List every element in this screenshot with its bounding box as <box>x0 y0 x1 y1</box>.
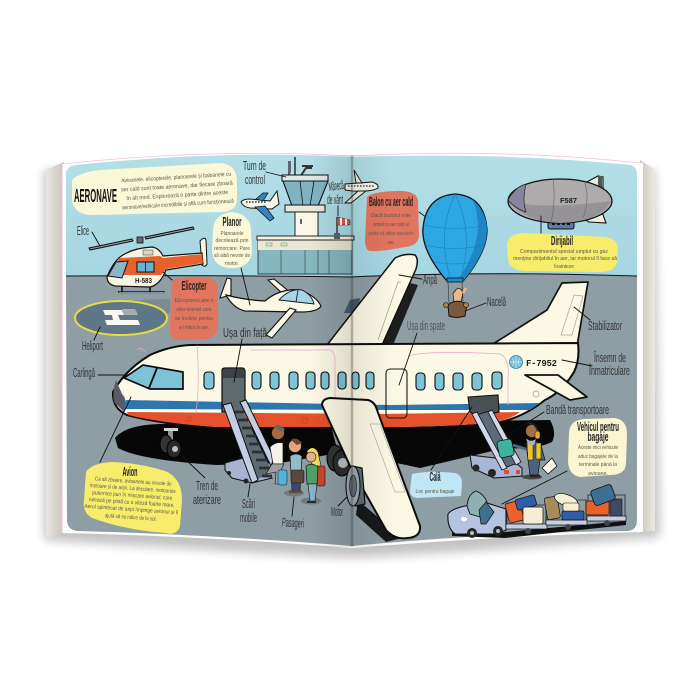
panel: Elicopter: elice imensă care <box>176 307 212 313</box>
label: Însemn de înmatriculare <box>562 350 630 378</box>
label: Însemn de înmatriculare: Înmatriculare <box>588 363 630 378</box>
panel: Avion <box>84 397 182 534</box>
panel: Elicopter: Elicopter <box>182 279 207 293</box>
label: Mânecă de vânt <box>327 178 345 216</box>
rear door <box>386 369 407 418</box>
panel: Planor: Planor <box>222 215 242 229</box>
open book block <box>46 152 655 548</box>
glider <box>220 278 321 338</box>
helicopter <box>89 227 207 293</box>
mobile stairs <box>223 400 274 484</box>
text: Aripă <box>423 273 437 287</box>
label: Scări mobile: Scări <box>242 497 255 511</box>
panel: Planor: să aibă nevoie de <box>214 253 250 259</box>
panel: Cală: Cală <box>430 470 441 484</box>
blimp: F587 <box>560 196 577 205</box>
small plane in sky <box>241 191 279 221</box>
trailer with luggage <box>586 484 626 526</box>
registration mark <box>510 356 557 369</box>
text: Pasageri <box>282 515 304 531</box>
baggage tractor <box>448 491 506 538</box>
intro text: aeronave/vehicule incredibile și află cum funcționează <box>122 199 235 211</box>
panel: Vehicul pentru bagaje: aduc bagajele de la <box>578 454 619 460</box>
label: Stabilizator: Stabilizator <box>588 319 622 333</box>
intro text: aer cald sunt toate aeronave, dar fiecare zboară <box>121 181 234 193</box>
label: Tren de aterizare: Tren de <box>196 479 218 493</box>
conveyor vehicle <box>468 395 522 478</box>
label: Nacelă <box>465 295 506 311</box>
label: Tren de aterizare: aterizare <box>193 493 221 507</box>
text: de vânt <box>327 193 343 207</box>
far wing <box>327 254 418 345</box>
label: Turn de control: Turn de <box>243 159 266 173</box>
front door <box>222 368 245 412</box>
panel: Planor: decolează prin <box>216 238 248 244</box>
intro text <box>120 172 235 211</box>
center gutter shading <box>310 155 394 547</box>
panel: Avion: puternice pun în mișcare avionul, care <box>92 490 172 502</box>
panel: Avion: motoare și de aripi. La decolare, motoarele <box>90 483 176 495</box>
label: Bandă transportoare <box>506 403 609 436</box>
landing gear <box>160 428 181 458</box>
text: Heliport <box>82 339 103 353</box>
panel: Elicopter: a-l ridica în aer. <box>179 325 209 331</box>
panel: Balon cu aer cald: umplut cu aer cald, el <box>373 222 409 228</box>
near wing <box>322 398 420 542</box>
large plane in sky <box>345 170 378 203</box>
trailer with luggage <box>505 494 547 534</box>
label: Heliport <box>82 327 103 353</box>
registration mark: F-7952 <box>526 359 557 369</box>
panel: Avion: ajută să se ridice de la sol. <box>105 513 157 523</box>
panel: Vehicul pentru bagaje: avioane. <box>588 471 608 477</box>
text: Mânecă <box>328 178 345 194</box>
passengers <box>266 425 325 504</box>
panel: Balon cu aer cald <box>365 191 430 251</box>
control tower <box>257 157 354 274</box>
panel: Vehicul pentru bagaje <box>502 418 627 504</box>
panel: Dirijabil: înainteze <box>553 264 574 270</box>
panel: Elicopter: se învârte pentru <box>175 316 213 322</box>
passenger: man with bag <box>284 439 304 496</box>
label: Stabilizator <box>574 307 622 333</box>
panel: Dirijabil: menține dirijabilul în aer, iar motorul îl face să <box>513 256 618 262</box>
panel: Dirijabil: Dirijabil <box>551 234 573 248</box>
panel: Vehicul pentru bagaje: Aceste mici vehicule <box>578 445 618 451</box>
text: Ușa din spate <box>407 319 445 333</box>
panel: Vehicul pentru bagaje: bagaje <box>588 430 609 444</box>
panel: Avion: Avion <box>122 465 138 479</box>
panel: Planor: motor. <box>225 261 239 267</box>
book shadow <box>44 170 660 558</box>
panel: Planor: Planoarele <box>220 231 244 237</box>
apron ground <box>66 273 637 546</box>
engine <box>346 466 365 506</box>
panel: Balon cu aer cald: poate să ridice nacela în <box>368 231 414 237</box>
blimp <box>508 176 612 229</box>
panel: Cală: Loc pentru bagaje <box>416 489 454 495</box>
tail fin <box>493 282 588 346</box>
heliport <box>75 299 170 335</box>
label: Motor: Motor <box>331 505 343 519</box>
intro text: în alt mod. Explorează o parte dintre aceste <box>125 190 228 202</box>
panel: Planor: remorcare. Pare <box>214 246 250 252</box>
text: mobile <box>240 511 257 525</box>
intro panel <box>72 163 237 215</box>
text: Nacelă <box>487 295 506 309</box>
panel: Elicopter <box>163 272 218 340</box>
label: Tren de aterizare <box>182 456 221 507</box>
intro text: Avioanele, elicopterele, planoarele și baloanele cu <box>121 172 231 184</box>
label: Ușa din față <box>223 326 267 382</box>
panel: Balon cu aer cald: Dacă balonul este <box>371 213 411 219</box>
label: Turn de control <box>243 159 286 187</box>
airplane shadow on apron <box>115 420 554 468</box>
panel: Balon cu aer cald: aer. <box>388 240 395 246</box>
baggage train <box>448 484 626 538</box>
label: Aripă <box>399 273 437 287</box>
panel: Avion: Ca să zboare, avioanele au nevoie de <box>95 476 172 488</box>
label: Carlingă: Carlingă <box>73 366 95 380</box>
label: Motor <box>331 497 347 519</box>
label: Elice: Elice <box>77 224 89 238</box>
passenger: man with goggles <box>266 425 287 485</box>
label: Bandă transportoare: Bandă transportoare <box>546 403 609 417</box>
label: Pasageri <box>282 497 304 531</box>
wind sock <box>334 217 350 239</box>
passenger: woman with backpack <box>301 448 325 504</box>
label: Însemn de înmatriculare: Însemn de <box>593 350 626 365</box>
panel: Avion: Aerul spintecat de aripi împinge avionul și îl <box>84 504 178 516</box>
panel: Dirijabil: Compartimentul special umplut cu gaz <box>520 249 608 255</box>
panel: Dirijabil <box>507 216 618 272</box>
trailer with luggage <box>544 491 587 530</box>
intro panel: AERONAVE <box>74 186 117 206</box>
panel: Elicopter: Elicopterul are o <box>174 298 214 304</box>
label: Ușa din spate <box>399 319 445 385</box>
cabin windows <box>204 372 502 390</box>
helicopter: H-583 <box>135 278 152 285</box>
main gear and engine <box>327 420 351 476</box>
label: Turn de control: control <box>245 173 265 187</box>
panel: Cală <box>410 407 472 498</box>
panel: Balon cu aer cald: Balon cu aer cald <box>369 195 413 209</box>
panel: Vehicul pentru bagaje: terminale până la <box>579 462 618 468</box>
label: Ușa din față: Ușa din față <box>223 326 267 340</box>
panel: Vehicul pentru bagaje: Vehicul pentru <box>577 420 619 434</box>
fuselage <box>113 343 578 428</box>
hot air balloon <box>423 194 487 318</box>
label: Elice <box>77 224 100 246</box>
panel: Planor <box>212 212 252 305</box>
sky background <box>66 155 637 277</box>
baggage worker <box>513 423 557 480</box>
horizontal stabilizer <box>525 375 587 400</box>
label: Scări mobile <box>240 484 257 525</box>
panel: Avion: rulează pe pistă cu o viteză foarte mare. <box>89 497 175 509</box>
